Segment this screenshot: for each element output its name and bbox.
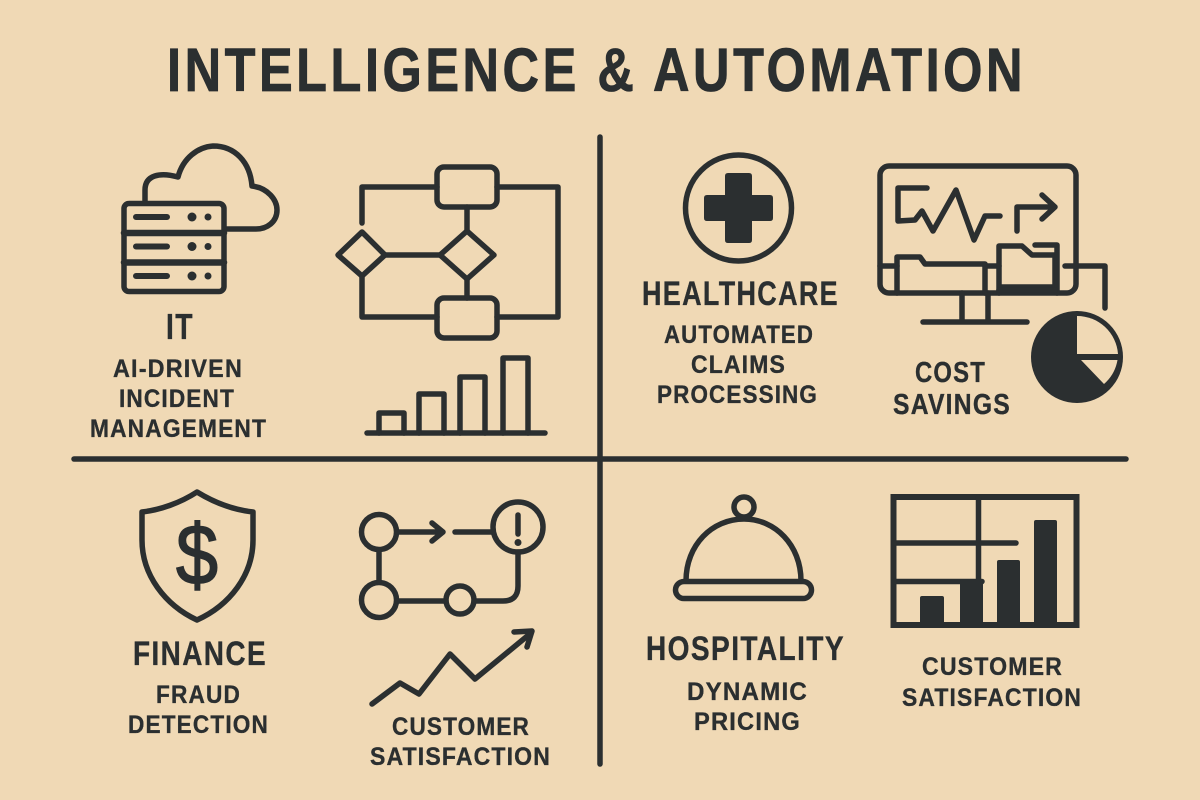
panel: Healthcare bbox=[642, 155, 1123, 421]
text: automated claims processing: PROCESSING bbox=[657, 381, 818, 409]
heading: Hospitality: HOSPITALITY bbox=[646, 630, 845, 668]
label: customer satisfaction: CUSTOMER bbox=[392, 713, 530, 741]
text: dynamic pricing bbox=[687, 678, 808, 736]
quadrant divider lines bbox=[74, 137, 1126, 764]
text: AI-driven incident management bbox=[90, 355, 267, 443]
label: cost savings: COST bbox=[915, 357, 986, 389]
title: INTELLIGENCE & AUTOMATION bbox=[167, 36, 1026, 104]
text: dynamic pricing: DYNAMIC bbox=[687, 678, 808, 706]
icon: alert process flow bbox=[362, 502, 543, 618]
icon: serving cloche bbox=[676, 497, 812, 598]
heading: Healthcare: HEALTHCARE bbox=[642, 275, 839, 313]
text: automated claims processing: CLAIMS bbox=[691, 351, 786, 379]
chart: rising trend arrow bbox=[372, 631, 532, 704]
panel: Hospitality bbox=[646, 497, 1082, 736]
heading: IT: IT bbox=[166, 306, 194, 347]
chart: pie bbox=[1031, 311, 1123, 403]
label: cost savings: SAVINGS bbox=[893, 389, 1011, 421]
text: AI-driven incident management: MANAGEMENT bbox=[90, 415, 267, 443]
icon: shield with dollar bbox=[142, 492, 253, 620]
text: fraud detection: DETECTION bbox=[128, 711, 269, 739]
label: customer satisfaction: CUSTOMER bbox=[922, 653, 1063, 681]
heading: Finance: FINANCE bbox=[133, 635, 267, 673]
label: customer satisfaction bbox=[902, 653, 1082, 712]
label: cost savings bbox=[893, 357, 1011, 421]
icon: medical cross bbox=[686, 155, 792, 261]
text: AI-driven incident management: INCIDENT bbox=[119, 385, 235, 413]
text: AI-driven incident management: AI-DRIVEN bbox=[113, 355, 243, 383]
text: automated claims processing bbox=[657, 321, 818, 409]
text: fraud detection: FRAUD bbox=[156, 681, 241, 709]
chart: rising bars bbox=[367, 358, 545, 433]
text: fraud detection bbox=[128, 681, 269, 739]
icon: shield with dollar: $ bbox=[176, 508, 218, 603]
icon: workflow diagram bbox=[338, 167, 558, 338]
icon: monitor with folders bbox=[880, 166, 1105, 322]
text: dynamic pricing: PRICING bbox=[694, 708, 801, 736]
label: customer satisfaction: SATISFACTION bbox=[370, 743, 551, 771]
chart: table with bars bbox=[894, 497, 1076, 626]
text: automated claims processing: AUTOMATED bbox=[664, 321, 814, 349]
panel: IT bbox=[90, 146, 558, 443]
panel: Finance bbox=[128, 492, 551, 771]
label: customer satisfaction bbox=[370, 713, 551, 771]
label: customer satisfaction: SATISFACTION bbox=[902, 684, 1082, 712]
icon: server and cloud bbox=[124, 146, 277, 292]
